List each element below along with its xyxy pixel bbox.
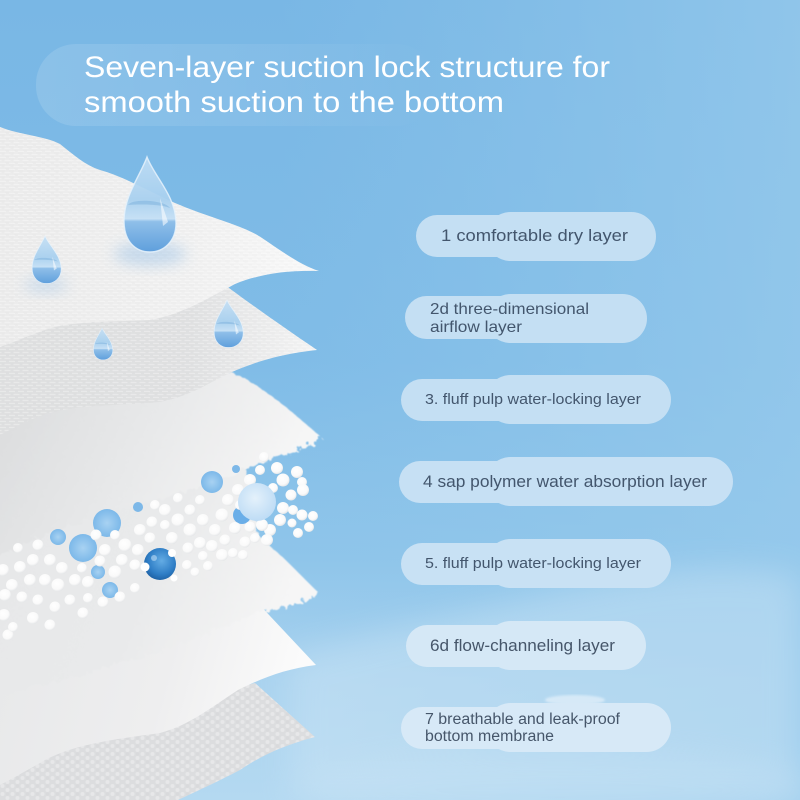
label 3: fluff pulp water-locking layer: 3. fluff pulp water-locking layer bbox=[425, 391, 641, 408]
label 5: fluff pulp water-locking layer bbox=[401, 539, 671, 588]
label 2: three-dimensional airflow layer: airflow layer bbox=[430, 319, 523, 336]
title backing pill bbox=[36, 44, 436, 126]
layer 3: fluff pulp layer bbox=[0, 372, 322, 565]
label 2: three-dimensional airflow layer bbox=[405, 294, 647, 343]
title text: smooth suction to the bottom bbox=[84, 86, 504, 119]
icon: small water drop centre bbox=[93, 328, 113, 360]
label 6: flow-channeling layer: 6d flow-channeling layer bbox=[430, 636, 615, 655]
icon: small water drop right bbox=[214, 300, 243, 348]
label 5: fluff pulp water-locking layer: 5. fluff pulp water-locking layer bbox=[425, 555, 641, 572]
label 3: fluff pulp water-locking layer bbox=[401, 375, 671, 424]
blue beads in front bbox=[140, 483, 276, 582]
layer 1: comfortable dry layer bbox=[0, 127, 319, 347]
label 4: sap polymer water absorption layer bbox=[399, 457, 733, 506]
icon: large water drop bbox=[124, 157, 176, 252]
icon: small water drop left bbox=[32, 236, 61, 284]
label 7: breathable and leak-proof bottom membrane: 7 breathable and leak-proof bbox=[425, 711, 621, 728]
label 4: sap polymer water absorption layer: 4 sap polymer water absorption layer bbox=[423, 472, 707, 491]
label 1: comfortable dry layer: 1 comfortable dry layer bbox=[441, 226, 628, 245]
title panel bbox=[36, 44, 610, 126]
layer 5: fluff pulp layer bbox=[0, 465, 320, 700]
layer 6: flow-channeling layer bbox=[0, 560, 316, 785]
label 7: breathable and leak-proof bottom membrane bbox=[401, 703, 671, 752]
blue absorbed beads bbox=[50, 465, 251, 598]
layer 7: breathable bottom membrane bbox=[0, 683, 315, 800]
label 1: comfortable dry layer bbox=[416, 212, 656, 261]
title text bbox=[84, 51, 610, 119]
label 6: flow-channeling layer bbox=[406, 621, 646, 670]
white polymer beads bbox=[0, 452, 318, 640]
title text: Seven-layer suction lock structure for bbox=[84, 51, 610, 84]
label 2: three-dimensional airflow layer: 2d three-dimensional bbox=[430, 301, 589, 318]
label 7: breathable and leak-proof bottom membrane: bottom membrane bbox=[425, 728, 554, 745]
layer 2: three-dimensional airflow layer bbox=[0, 285, 317, 435]
water drop shadows bbox=[24, 242, 186, 293]
